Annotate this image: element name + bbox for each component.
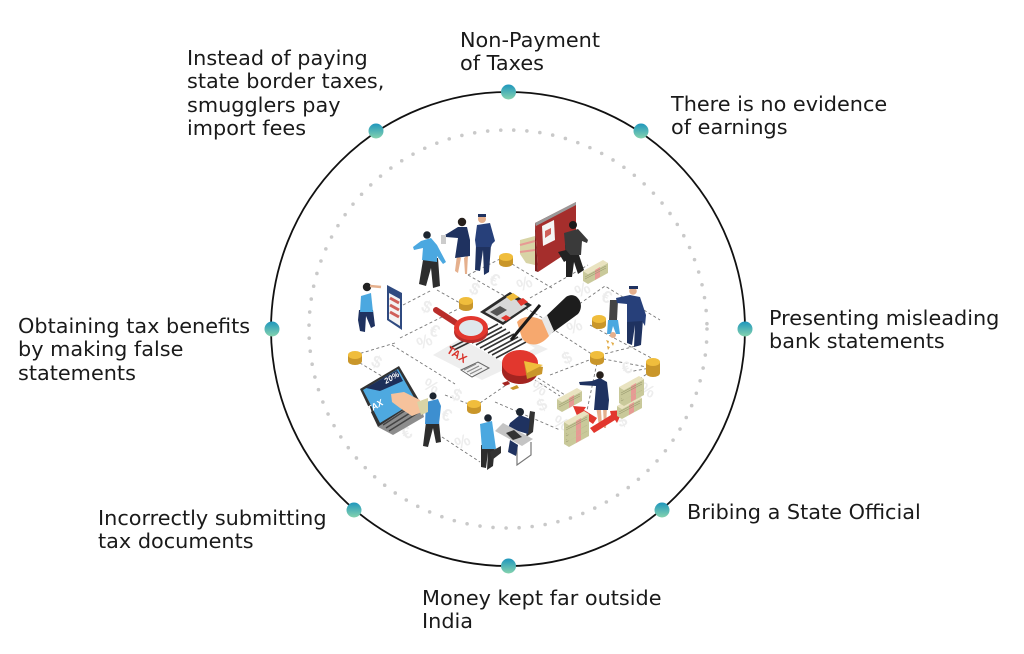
faint currency symbols: € (598, 286, 615, 308)
faint currency symbols: $ (418, 296, 435, 318)
faint currency symbols: % (528, 376, 550, 400)
office desk and seated officer (495, 408, 535, 465)
tax document (433, 323, 548, 380)
label: smugglers: smugglers pay (187, 93, 340, 117)
pie chart (502, 350, 543, 390)
figure: man with money at laptop (417, 392, 441, 447)
figure: man in blue shirt (413, 231, 446, 288)
label: money outside India: Money kept far outside (422, 586, 662, 610)
label: no evidence of earnings: There is no evidence (671, 92, 887, 116)
faint currency symbols: % (550, 411, 572, 435)
faint currency symbols: $ (466, 278, 483, 300)
calculator (480, 292, 532, 325)
figure: male officer (475, 214, 495, 275)
faint currency symbols: % (564, 315, 585, 339)
faint currency symbols: $ (614, 410, 631, 432)
figure: woman holding head (358, 283, 381, 332)
faint currency symbols: € (619, 357, 636, 379)
faint currency symbols: $ (559, 347, 576, 369)
faint currency symbols: % (414, 330, 435, 354)
faint currency symbols: € (486, 269, 503, 291)
red arrows (573, 406, 623, 433)
magnifying glass (436, 310, 488, 343)
figure: female officer (441, 218, 470, 274)
faint currency symbols: $ (448, 384, 465, 406)
label: misleading bank statements: Presenting misleading (769, 306, 999, 330)
faint currency symbols: % (572, 278, 593, 302)
TAX label: TAX (444, 344, 469, 366)
money stack (583, 260, 608, 284)
label: false statements: Obtaining tax benefits (18, 314, 250, 338)
label: non-payment of taxes: Non-Payment (460, 28, 600, 52)
label: smugglers: state border taxes, (187, 69, 384, 93)
label: smugglers: import fees (187, 116, 306, 140)
label: false statements: statements (18, 361, 136, 385)
faint currency symbols (368, 269, 658, 454)
laptop with hand (360, 366, 424, 435)
faint currency symbols: € (399, 422, 416, 444)
faint currency symbols: % (636, 378, 658, 402)
laptop with hand: 20% (382, 370, 401, 386)
label: no evidence of earnings: of earnings (671, 115, 788, 139)
label: bribing: Bribing a State Official (687, 500, 921, 524)
tax form card (387, 285, 402, 330)
hand with pen (511, 295, 581, 345)
faint currency symbols: € (426, 320, 443, 342)
hanging person (606, 300, 620, 350)
label: money outside India: India (422, 609, 473, 633)
dotted inner circle (309, 130, 707, 528)
outer circle (271, 92, 745, 566)
connector dots (264, 84, 752, 574)
faint currency symbols: % (514, 272, 535, 296)
faint currency symbols: $ (534, 394, 551, 416)
label: incorrect tax documents: Incorrectly submitting (98, 506, 327, 530)
brick wall with poster (535, 202, 576, 272)
money stacks (557, 376, 644, 447)
faint currency symbols: % (452, 430, 473, 454)
figure: female officer pointing (579, 371, 609, 428)
figure: businessman with briefcase (558, 221, 588, 277)
laptop with hand: TAX (365, 397, 386, 415)
label: smugglers: Instead of paying (187, 46, 368, 70)
central illustration (348, 202, 660, 470)
figure: officer holding person upside down (606, 286, 646, 350)
faint currency symbols: € (438, 404, 455, 426)
figure: man at desk (480, 414, 501, 470)
icon: gold coins (348, 253, 660, 414)
label: misleading bank statements: bank statements (769, 329, 945, 353)
faint currency symbols: $ (368, 351, 385, 373)
label: incorrect tax documents: tax documents (98, 529, 254, 553)
label: false statements: by making false (18, 337, 183, 361)
faint currency symbols: % (420, 374, 442, 398)
dashed grid lines (355, 259, 660, 462)
money near wall (520, 236, 535, 265)
label: non-payment of taxes: of Taxes (460, 51, 544, 75)
